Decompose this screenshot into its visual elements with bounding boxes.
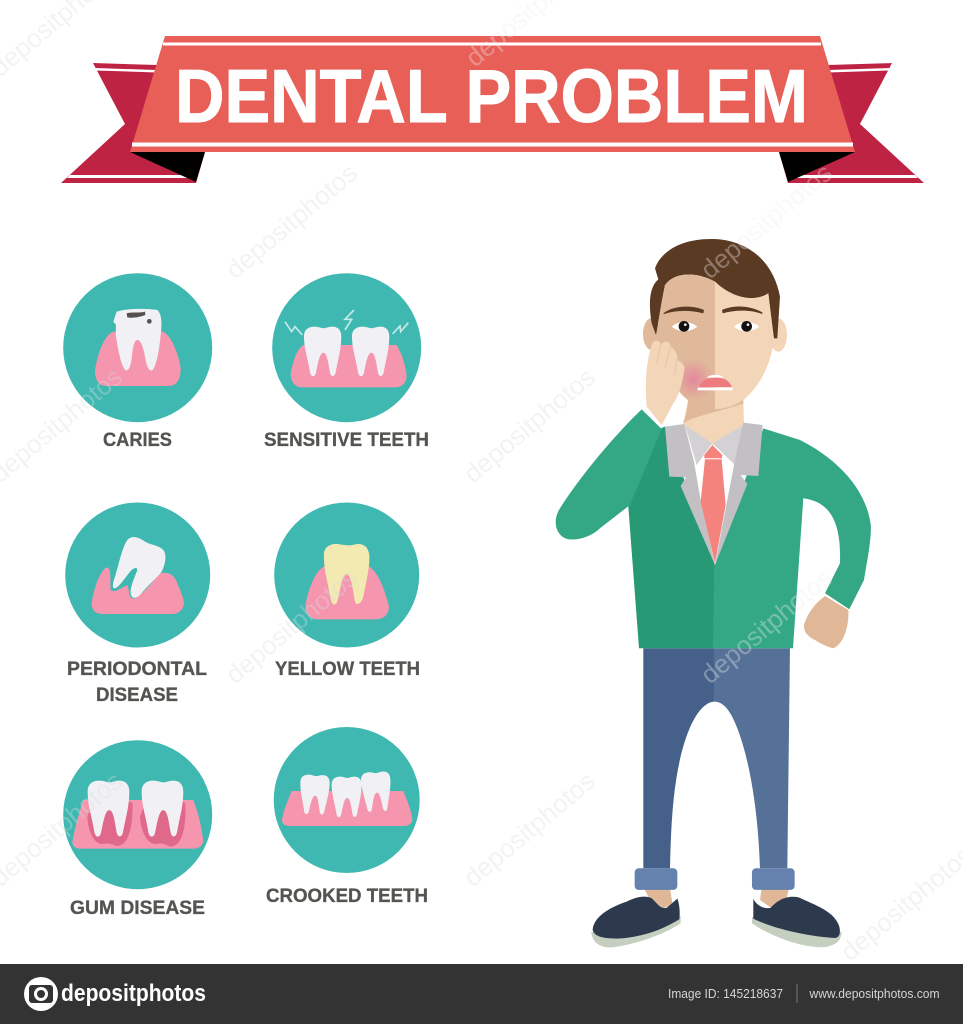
mouth <box>698 375 733 390</box>
trousers <box>591 596 848 947</box>
panel: caries <box>63 273 212 451</box>
icon: inflamed gums <box>72 781 203 849</box>
ribbon main <box>130 36 855 152</box>
panel: sensitive teeth <box>264 273 429 451</box>
label: PERIODONTAL <box>67 659 207 680</box>
footer bar <box>0 964 963 1024</box>
label: GUM DISEASE <box>70 898 205 919</box>
banner <box>61 36 924 183</box>
icon: decayed tooth <box>95 309 181 386</box>
title: DENTAL PROBLEM <box>175 54 808 138</box>
logo wordmark: depositphotos <box>61 980 206 1007</box>
hair <box>650 239 780 338</box>
watermarks: depositphotos <box>458 766 601 893</box>
website: www.depositphotos.com <box>809 987 940 1001</box>
jacket <box>556 409 871 648</box>
icon: sensitive teeth <box>285 310 408 387</box>
eyebrows <box>663 307 704 314</box>
watermarks: depositphotos <box>695 158 838 285</box>
ears <box>643 318 660 350</box>
image id: Image ID: 145218637 <box>668 987 783 1001</box>
label: SENSITIVE TEETH <box>264 430 429 451</box>
panel: crooked teeth <box>266 727 428 907</box>
face <box>657 275 774 409</box>
label: YELLOW TEETH <box>275 659 420 680</box>
logo icon: camera <box>24 977 58 1011</box>
icon: yellow tooth <box>305 544 389 619</box>
ribbon left tail <box>61 63 205 183</box>
watermarks: depositphotos <box>458 362 601 489</box>
icon: crooked teeth <box>282 771 412 826</box>
watermarks: depositphotos <box>695 563 838 690</box>
watermarks: depositphotos <box>220 158 363 285</box>
hand <box>646 341 684 425</box>
character: man with toothache <box>556 239 871 947</box>
panel: gum disease <box>63 740 212 919</box>
fist <box>804 596 848 648</box>
ribbon right tail <box>779 63 924 183</box>
panel: yellow teeth <box>274 502 420 680</box>
necktie <box>701 445 726 563</box>
label: CROOKED TEETH <box>266 886 428 907</box>
collar and lapels <box>665 423 763 565</box>
panel: periodontal disease: DISEASE <box>96 685 178 706</box>
panel: periodontal disease <box>65 502 210 706</box>
shoes <box>591 897 842 947</box>
label: CARIES <box>103 430 172 451</box>
watermarks: depositphotos <box>220 563 363 690</box>
eyes <box>672 321 759 332</box>
neck <box>683 398 744 445</box>
icon: loose tooth <box>92 537 184 614</box>
